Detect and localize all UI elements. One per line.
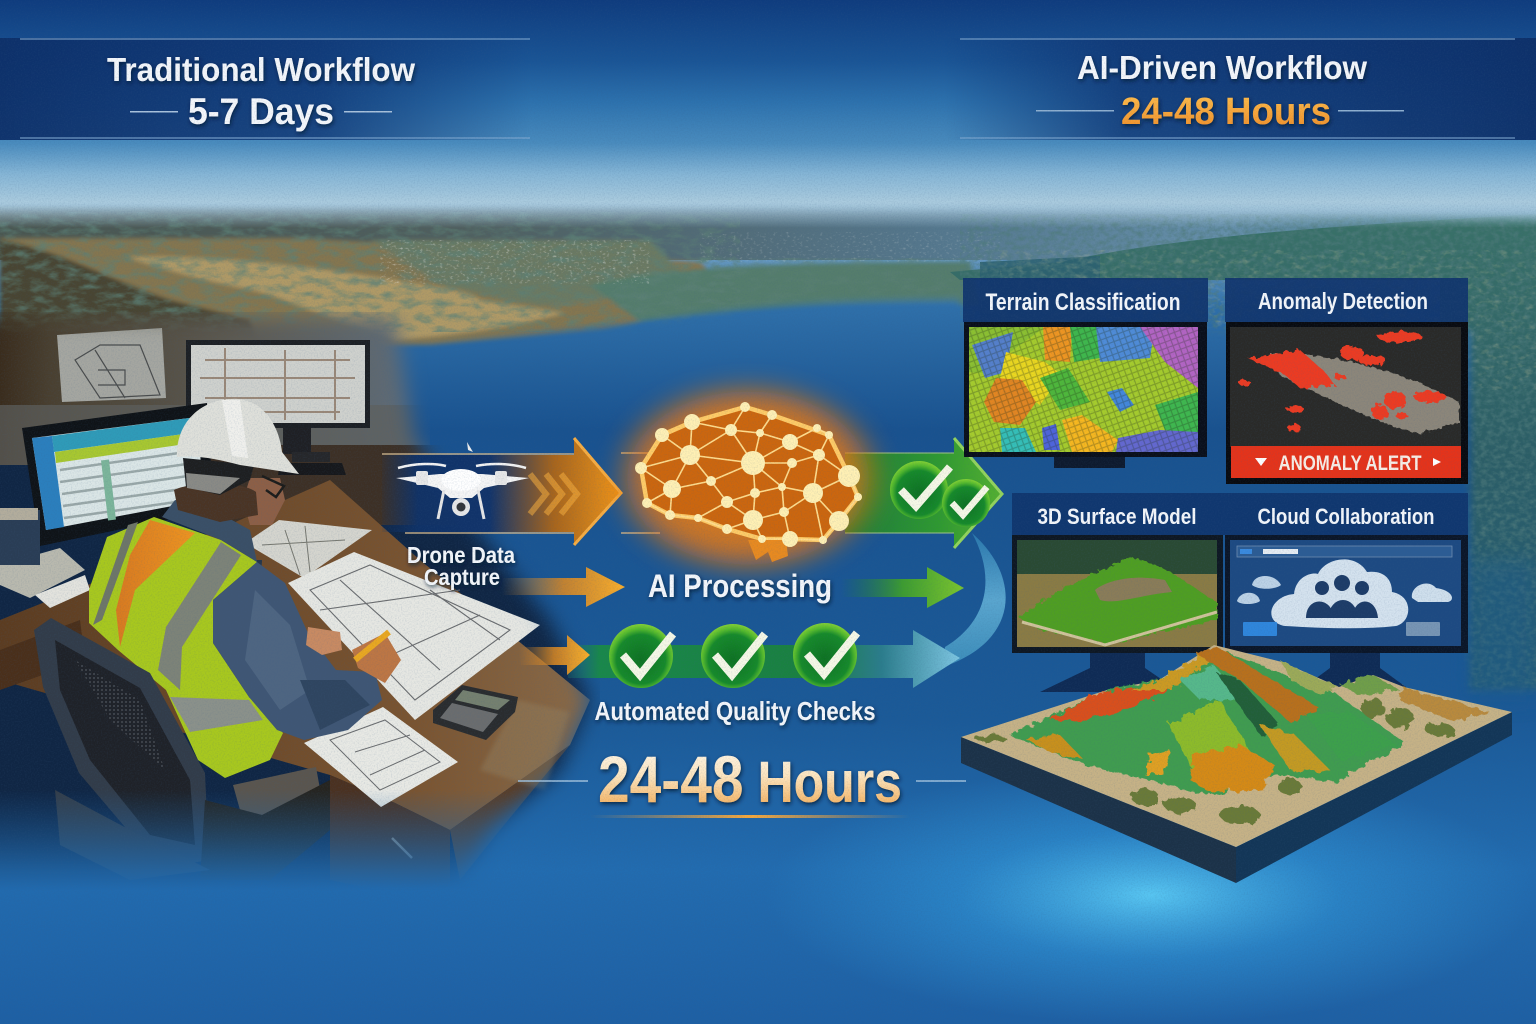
panel title: Anomaly Detection — [1258, 288, 1428, 314]
label: drone data capture: Drone Data — [407, 542, 515, 568]
heading: traditional workflow: Traditional Workflow — [107, 51, 415, 88]
brain network — [635, 402, 862, 562]
label: drone data capture: Capture — [424, 564, 500, 590]
glow: brain — [606, 376, 890, 580]
panel: anomaly detection — [1225, 278, 1468, 484]
traditional workflow banner — [0, 38, 530, 140]
duration: 24-48 hours: 24-48 Hours — [1121, 91, 1331, 133]
3D terrain model — [961, 645, 1512, 883]
high-vis vest — [89, 517, 283, 778]
mountain surfaces — [974, 645, 1490, 824]
middle orange arrow — [502, 567, 625, 607]
top check badges — [890, 461, 990, 527]
collar and head — [162, 500, 257, 562]
green top arrow — [845, 438, 1002, 548]
jacket arm — [213, 562, 382, 740]
hands and pencil — [306, 627, 342, 655]
jacket torso — [213, 560, 262, 698]
engineer — [89, 399, 401, 778]
result: 24-48 hours: 24-48 Hours — [598, 742, 902, 816]
label: AI processing: AI Processing — [648, 568, 832, 604]
panel: 3D surface model — [1012, 493, 1225, 653]
alert bar: ANOMALY ALERT — [1278, 452, 1422, 475]
monitor stands — [1040, 652, 1410, 692]
AI-driven workflow banner — [945, 38, 1536, 140]
icon: cloud with users — [1237, 559, 1452, 636]
desk notes — [480, 700, 570, 790]
hard hat — [177, 399, 299, 474]
lower check badges — [609, 623, 857, 688]
front monitor spreadsheet — [22, 403, 214, 546]
duration: 5-7 days: 5-7 Days — [188, 91, 334, 132]
panel: terrain classification — [963, 278, 1208, 468]
panel title: 3D Surface Model — [1038, 504, 1196, 529]
back monitor — [186, 340, 370, 475]
terrain ground — [961, 645, 1512, 847]
panel: cloud collaboration — [1225, 493, 1468, 653]
top orange arrow — [382, 438, 621, 545]
calculator — [433, 685, 518, 740]
panel title: Terrain Classification — [986, 289, 1180, 316]
middle green arrow — [841, 567, 964, 608]
alert bar — [1231, 446, 1461, 478]
right forest lower haze — [1470, 560, 1536, 702]
heading: AI-driven workflow: AI-Driven Workflow — [1077, 49, 1367, 86]
papers and items on desk — [0, 508, 540, 807]
label: automated quality checks: Automated Quality Checks — [594, 696, 876, 726]
workflow arrows — [382, 376, 1006, 818]
traditional office scene — [0, 312, 600, 905]
curved blue arrow — [943, 533, 1006, 667]
lower green-blue arrow — [568, 630, 960, 688]
wall plan — [57, 328, 166, 402]
lower orange arrow — [519, 635, 590, 675]
panel title: Cloud Collaboration — [1258, 504, 1434, 529]
landscape horizon — [0, 204, 1536, 700]
drone — [396, 442, 529, 519]
desk — [0, 480, 590, 830]
office chair — [34, 618, 330, 880]
